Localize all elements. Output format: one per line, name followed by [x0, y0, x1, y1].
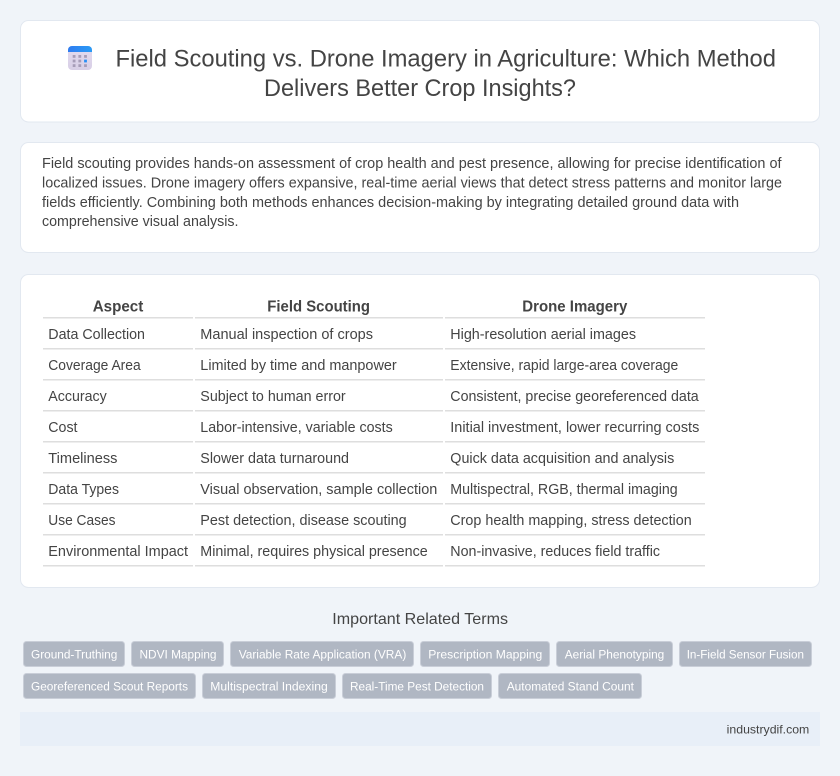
row: environmental impact [48, 544, 660, 560]
text block: introduction paragraph: fields efficiently. Combining both methods enhances decision-making by integrating detailed ground data with [42, 195, 739, 211]
tag: Automated Stand Count [507, 679, 635, 693]
row: cost: Labor-intensive, variable costs [200, 420, 393, 436]
title [116, 46, 776, 102]
tag: Ground-Truthing [31, 647, 117, 661]
row: environmental impact: Minimal, requires physical presence [200, 544, 428, 560]
tag: Multispectral Indexing [210, 679, 328, 693]
tag: Aerial Phenotyping [565, 647, 664, 661]
row: timeliness: Slower data turnaround [200, 451, 349, 467]
tag [24, 674, 196, 698]
table header row: Drone Imagery [522, 298, 627, 316]
tag: NDVI Mapping [140, 647, 216, 661]
row: environmental impact: Environmental Impact [48, 544, 188, 560]
table header row [93, 298, 627, 316]
title: Field Scouting vs. Drone Imagery in Agriculture: Which Method [116, 46, 776, 72]
row: cost: Initial investment, lower recurring costs [450, 420, 699, 436]
row: use cases: Pest detection, disease scouting [200, 513, 407, 529]
panel: introduction [20, 142, 820, 252]
row: data collection [48, 327, 636, 343]
text block: introduction paragraph: Field scouting provides hands-on assessment of crop health and pest presence, allowing for precise identification of [42, 156, 782, 172]
row: data collection: High-resolution aerial images [450, 327, 636, 343]
tag: Prescription Mapping [428, 647, 542, 661]
tag: Georeferenced Scout Reports [31, 679, 188, 693]
row: coverage area: Limited by time and manpower [200, 358, 397, 374]
row: environmental impact: Non-invasive, reduces field traffic [450, 544, 660, 560]
row: data types: Data Types [48, 482, 119, 498]
tag: In-Field Sensor Fusion [687, 647, 804, 661]
tag [680, 642, 812, 666]
table header row: Aspect [93, 298, 144, 316]
tag [202, 674, 336, 698]
row: accuracy: Consistent, precise georeferenced data [450, 389, 699, 405]
title: Delivers Better Crop Insights? [264, 75, 576, 102]
tag group: related terms [24, 642, 812, 698]
footer: industrydif.com [727, 722, 809, 736]
icon: calendar [68, 46, 92, 70]
row: timeliness: Timeliness [48, 451, 117, 467]
text block: introduction paragraph [42, 156, 782, 230]
row: coverage area [48, 358, 678, 374]
tag [498, 674, 642, 698]
footer [20, 712, 820, 746]
tag [342, 674, 492, 698]
row: cost [48, 420, 699, 436]
table header row: Field Scouting [267, 298, 370, 316]
heading: important related terms: Important Related Terms [332, 611, 508, 628]
tag [420, 642, 550, 666]
tag [230, 642, 414, 666]
tag [24, 642, 124, 666]
row: cost: Cost [48, 420, 78, 436]
row: timeliness: Quick data acquisition and analysis [450, 451, 674, 467]
tag: Variable Rate Application (VRA) [239, 647, 406, 661]
row: use cases: Use Cases [48, 513, 115, 529]
row: data types: Multispectral, RGB, thermal imaging [450, 482, 678, 498]
text block: introduction paragraph: localized issues. Drone imagery offers expansive, real-time aerial views that detect stress patterns and monitor large [42, 176, 782, 192]
panel: title header [20, 20, 820, 122]
row: data collection: Data Collection [48, 327, 145, 343]
tag [132, 642, 224, 666]
row: use cases [48, 513, 692, 529]
tag [556, 642, 672, 666]
row: data types [48, 482, 678, 498]
row: coverage area: Coverage Area [48, 358, 141, 374]
text block: introduction paragraph: comprehensive visual analysis. [42, 214, 238, 230]
row: accuracy: Subject to human error [200, 389, 346, 405]
row: data collection: Manual inspection of crops [200, 327, 373, 343]
tag: Real-Time Pest Detection [350, 679, 484, 693]
row: timeliness [48, 451, 674, 467]
row: use cases: Crop health mapping, stress detection [450, 513, 692, 529]
panel: comparison table [20, 274, 820, 588]
row: accuracy [48, 389, 699, 405]
row: accuracy: Accuracy [48, 389, 107, 405]
row: data types: Visual observation, sample collection [200, 482, 437, 498]
row: coverage area: Extensive, rapid large-area coverage [450, 358, 678, 374]
